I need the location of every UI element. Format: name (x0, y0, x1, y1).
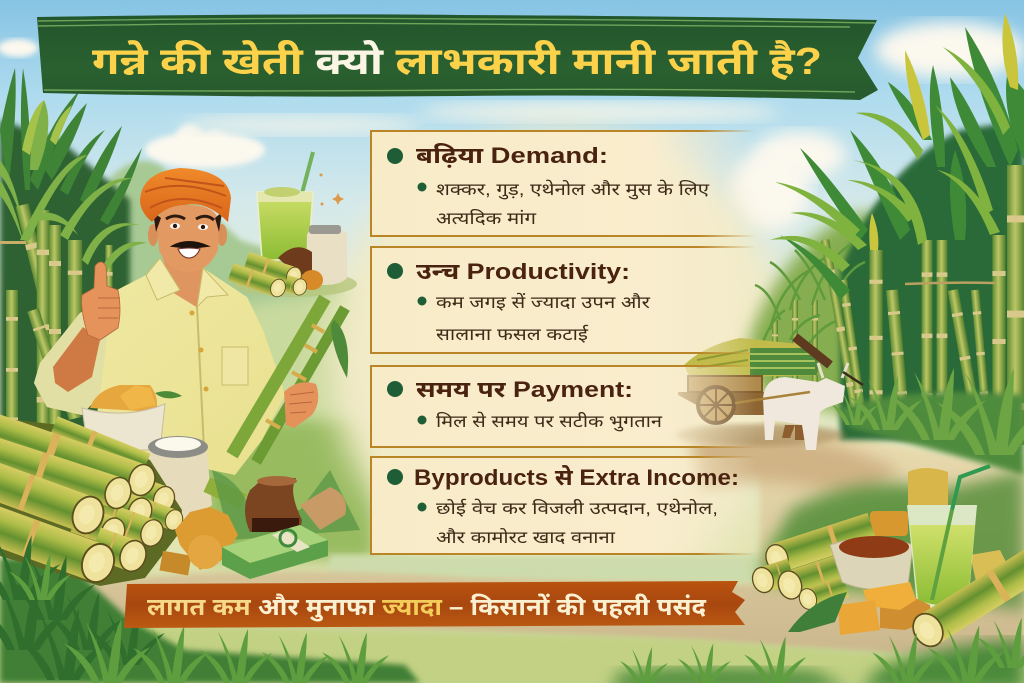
clouds (0, 22, 1024, 230)
ox (782, 425, 808, 440)
jaggery blocks (880, 598, 932, 630)
heading: payment: समय पर Payment: (416, 377, 633, 402)
turban (140, 168, 231, 222)
neck (163, 258, 203, 308)
left foreground jaggery, pot and money (159, 470, 360, 579)
text: productivity detail (418, 292, 651, 344)
road (60, 420, 1024, 660)
text: productivity detail: कम जगइ सें ज्यादा उपन और (436, 292, 651, 312)
left sugarcane field (0, 68, 147, 440)
right foreground juice and sugarcane (749, 466, 1024, 652)
panel: high demand (371, 131, 756, 236)
money stack (222, 525, 328, 579)
bottom slogan banner (124, 581, 745, 628)
text: byproducts detail: और कामोरट खाद वनाना (436, 527, 616, 547)
bullock cart (675, 337, 863, 450)
load (684, 338, 818, 378)
heading: byproducts: Byproducts से Extra Income: (414, 465, 739, 490)
thumbs up hand (82, 262, 120, 340)
hand (284, 382, 318, 428)
wheel (698, 387, 734, 423)
bowl (830, 538, 913, 589)
text: byproducts detail: छोई वेच कर विजली उत्पदान, एथेनोल, (436, 497, 718, 518)
panel: timely payment (371, 366, 756, 447)
face (148, 224, 158, 246)
text: demand detail: अत्यदिक मांग (436, 208, 536, 228)
text: demand detail: शक्कर, गुड़, एथेनोल और मुस के लिए (436, 178, 710, 201)
text: byproducts detail (418, 497, 718, 547)
leaves (780, 27, 1024, 300)
heading: demand (387, 143, 608, 169)
title banner (37, 14, 878, 100)
glass (907, 505, 977, 608)
text: payment detail: मिल से समय पर सटीक भुगतान (436, 410, 663, 433)
farmer (34, 168, 285, 475)
meadow (0, 600, 1024, 683)
collar (146, 258, 180, 300)
cart body (678, 392, 770, 415)
title: गन्ने की खेती क्यो लाभकारी मानी जाती है? (92, 39, 822, 83)
text: demand detail (418, 178, 710, 228)
text: productivity detail: सालाना फसल कटाई (436, 324, 589, 344)
juice, jar and jaggery group (228, 152, 357, 299)
hair and features (153, 212, 222, 232)
bowl of jaggery (82, 385, 182, 450)
hills and fields (100, 161, 370, 480)
arm (53, 327, 100, 392)
panel: high productivity (371, 247, 756, 353)
far field leaves (755, 245, 865, 350)
sugar jar (148, 436, 212, 520)
leaves (0, 68, 142, 225)
slogan: लागत कम और मुनाफा ज्यादा – किसानों की पहली पसंद (147, 593, 707, 622)
heading: productivity: उन्च Productivity: (416, 259, 630, 284)
text: payment detail (418, 410, 663, 433)
panel: byproducts (371, 457, 756, 554)
sugarcane pile (0, 413, 247, 587)
right sugarcane field (748, 13, 1024, 475)
shirt (34, 268, 285, 475)
heading: demand: बढ़िया Demand: (416, 143, 608, 169)
big cane (919, 541, 1024, 645)
canes held in hand (232, 298, 348, 462)
foreground grass (0, 535, 1024, 683)
